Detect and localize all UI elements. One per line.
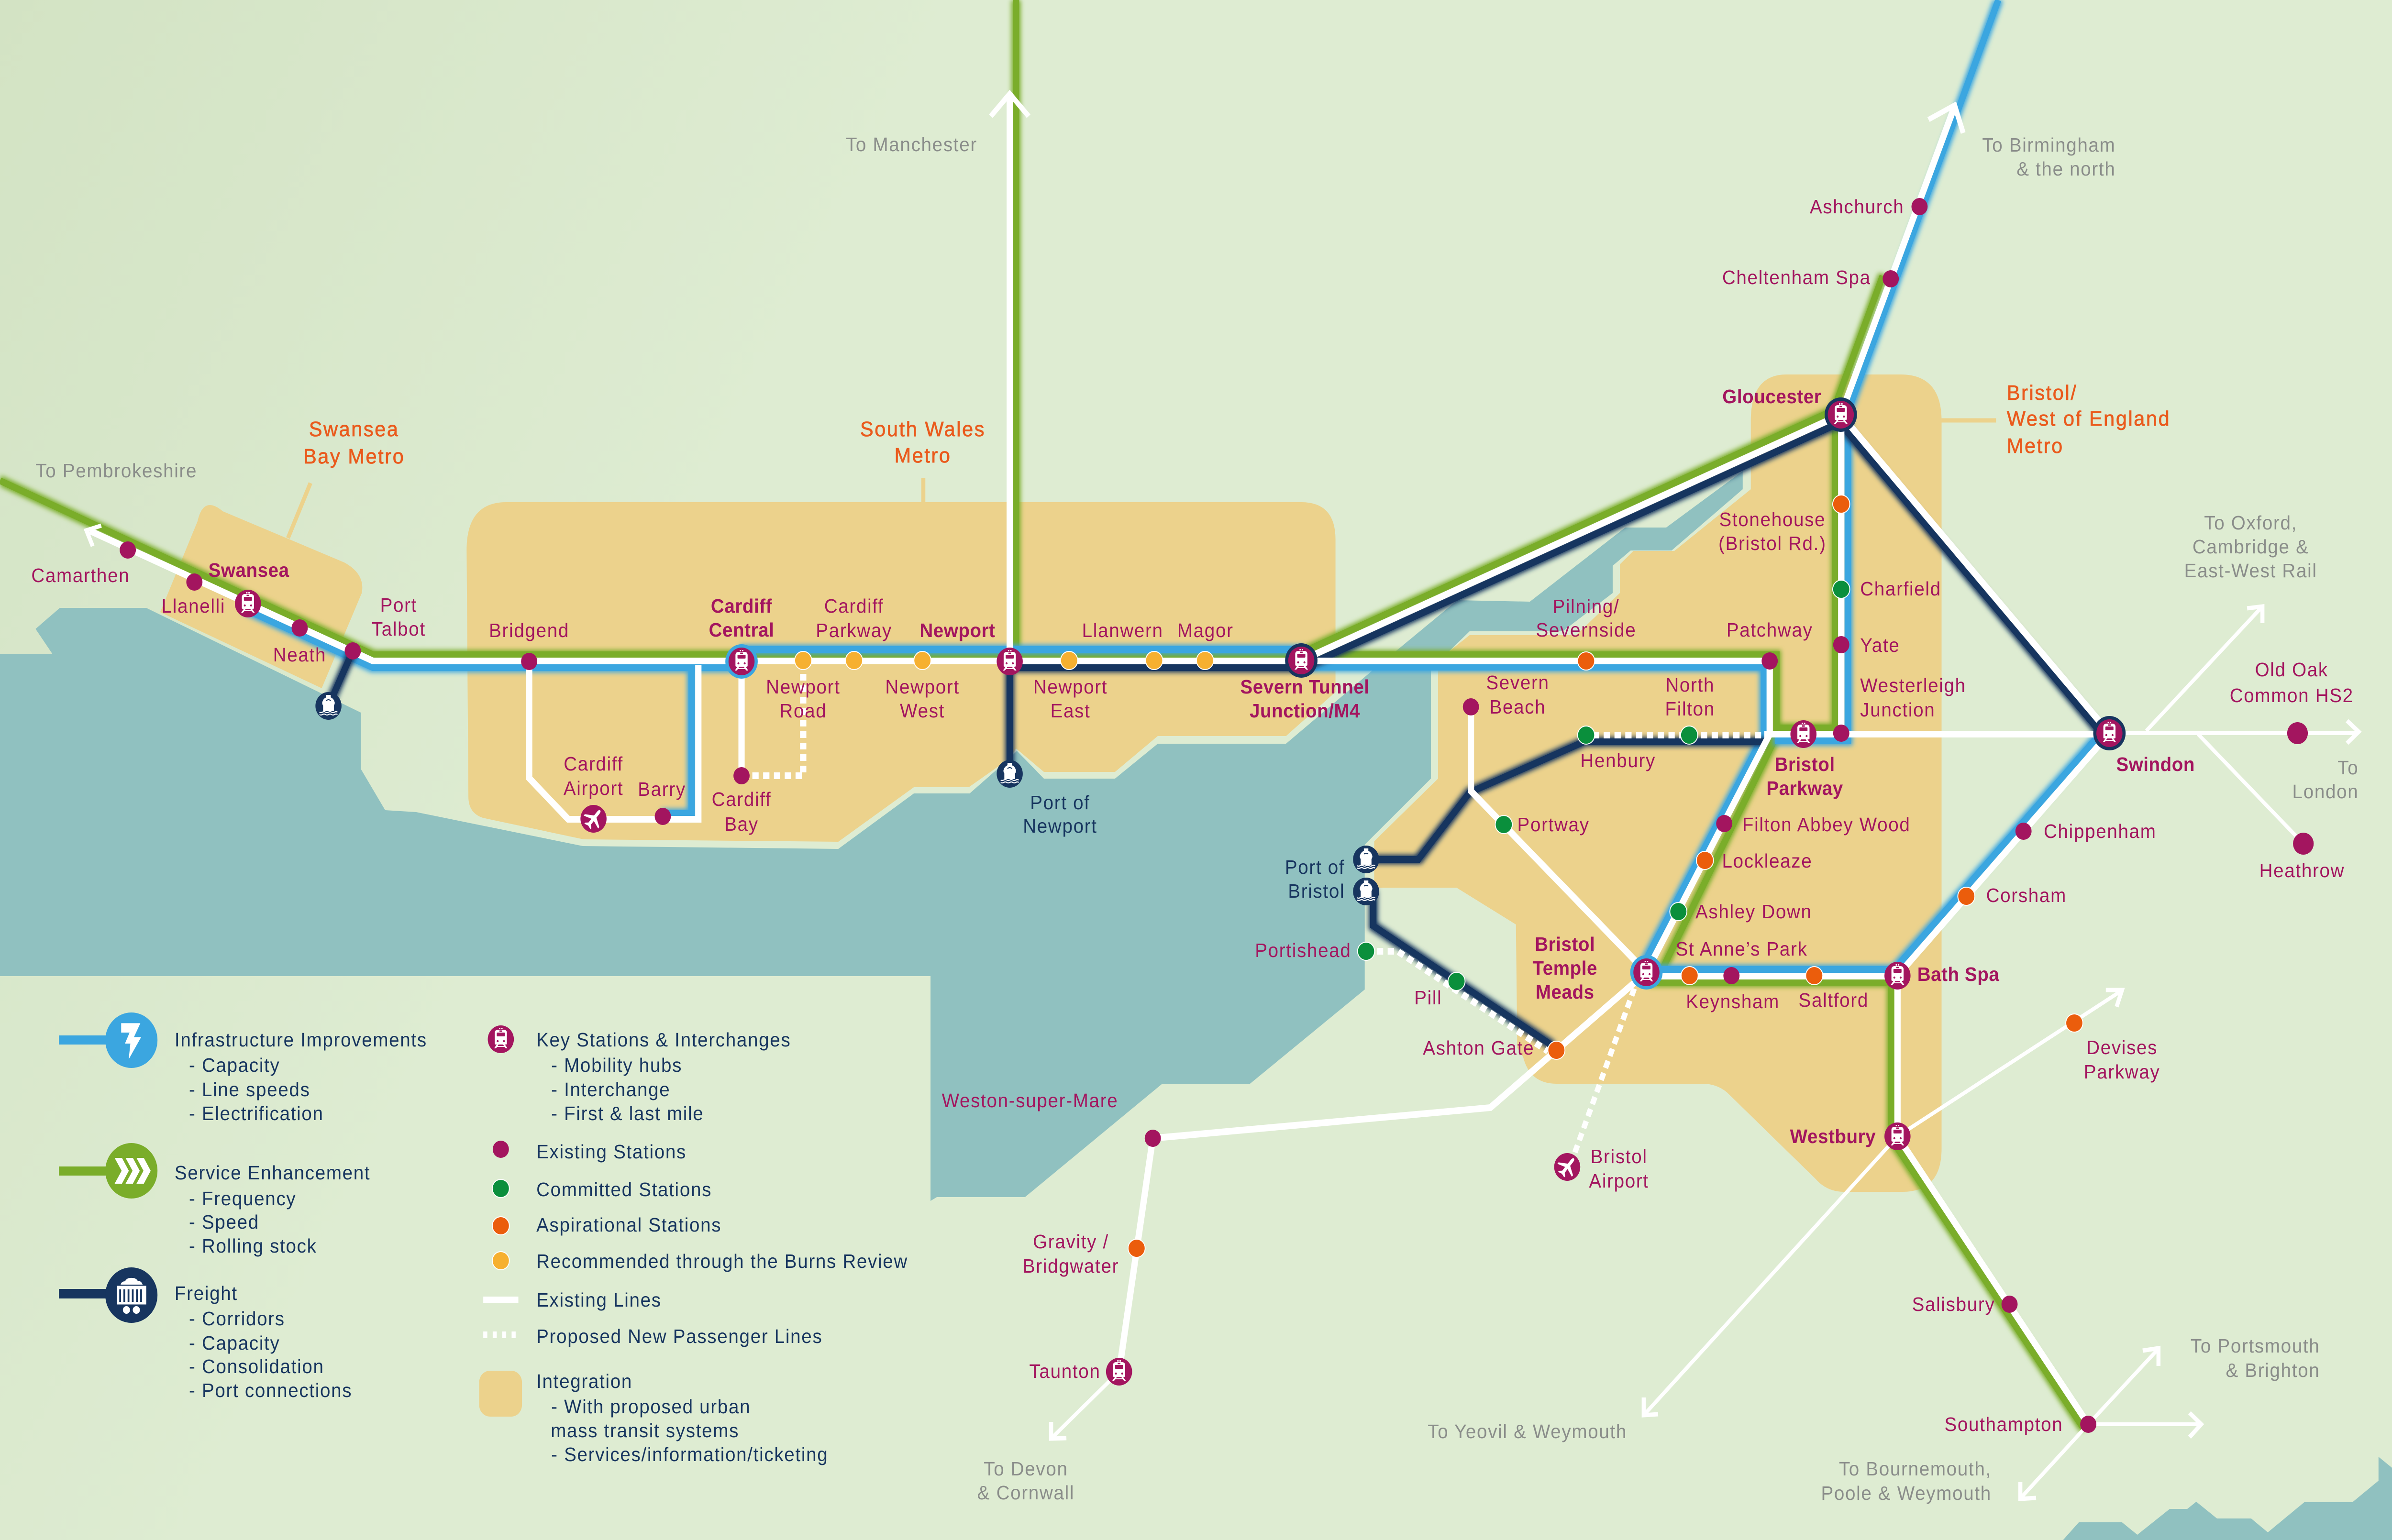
label: To London: To [2337, 757, 2359, 779]
key station: Severn Tunnel Junction [1285, 643, 1318, 678]
label: Ashley Down: Ashley Down [1695, 901, 1812, 923]
station: Cardiff Parkway [845, 651, 863, 670]
legend text: freight: - Consolidation [189, 1356, 324, 1377]
label: To Birmingham: & the north [2016, 158, 2115, 180]
label: Cardiff Airport: Cardiff [564, 753, 623, 775]
label: St Anne's Park: St Anne’s Park [1676, 938, 1808, 960]
label: Cardiff Central: Central [709, 619, 774, 641]
label: Old Oak Common HS2: Old Oak [2255, 659, 2328, 681]
legend icon: proposed lines [483, 1331, 519, 1338]
station: Llanwern [1146, 651, 1163, 670]
legend text: service enhancement: - Rolling stock [189, 1235, 317, 1257]
airport: Bristol [1554, 1152, 1581, 1181]
label: Port Talbot: Port [380, 594, 417, 616]
label: Bath Spa: Bath Spa [1917, 964, 2000, 985]
panel: South Wales Metro integration area [466, 502, 1336, 842]
label: To Devon: To Devon [984, 1458, 1068, 1480]
label: Weston-super-Mare: Weston-super-Mare [942, 1090, 1118, 1111]
label: Bristol Airport: Bristol [1591, 1146, 1648, 1167]
label: Filton Abbey Wood: Filton Abbey Wood [1742, 814, 1911, 836]
legend icon: freight [59, 1267, 157, 1323]
label: Cardiff Bay: Bay [724, 814, 759, 835]
label: Newport Road: Road [779, 700, 827, 722]
station: Southampton [2080, 1416, 2096, 1433]
heading: South Wales Metro: South Wales [860, 418, 986, 441]
label: To Portsmouth: To Portsmouth [2191, 1335, 2320, 1357]
key station: Westbury [1884, 1122, 1911, 1150]
label: Portway: Portway [1517, 814, 1590, 836]
label: Cardiff Parkway: Cardiff [824, 595, 884, 617]
airport: Cardiff [580, 804, 608, 833]
legend text: service enhancement: Service Enhancement [175, 1162, 370, 1184]
label: Keynsham: Keynsham [1686, 991, 1780, 1012]
heading: Bristol / West of England Metro: Metro [2007, 434, 2064, 458]
legend text: proposed lines: Proposed New Passenger Lines [536, 1326, 822, 1347]
label: Devises Parkway: Devises [2086, 1037, 2158, 1058]
station: Charfield [1833, 580, 1850, 598]
label: Henbury: Henbury [1580, 750, 1656, 771]
station: Carmarthen [120, 541, 136, 559]
station: Westerleigh Junction [1833, 725, 1849, 742]
label: Corsham: Corsham [1986, 885, 2067, 906]
label: Bristol Airport: Airport [1589, 1170, 1649, 1192]
legend text: key stations: - Mobility hubs [551, 1055, 682, 1076]
legend icon: infrastructure improvements [59, 1012, 157, 1068]
label: To Manchester: To Manchester [846, 134, 977, 155]
label: To Oxford: East-West Rail [2184, 560, 2317, 582]
station: Lockleaze [1696, 851, 1714, 869]
station: Cardiff Bay [733, 767, 750, 784]
heading: Bristol / West of England Metro: West of England [2007, 407, 2171, 430]
callout lines to metro headings [288, 420, 1996, 538]
infrastructure improvement lines (blue) [245, 0, 2105, 971]
station: Bridgend [521, 653, 537, 670]
station: Pill [1448, 972, 1465, 990]
key station: Bristol Temple Meads [1630, 955, 1662, 990]
legend text: infrastructure improvements: Infrastructure Improvements [175, 1029, 427, 1051]
legend text: infrastructure improvements: - Electrification [189, 1103, 324, 1124]
label: Bristol Temple Meads: Bristol [1535, 934, 1595, 955]
station: Port Talbot [344, 642, 361, 660]
legend text: infrastructure improvements: - Capacity [189, 1055, 280, 1076]
label: Saltford: Saltford [1799, 990, 1869, 1011]
station: Pilning [1578, 652, 1595, 670]
label: Llanelli: Llanelli [162, 595, 225, 617]
station: Llanelli [186, 573, 202, 591]
station: Barry [655, 808, 671, 825]
heading: Swansea Bay Metro: Bay Metro [303, 445, 405, 468]
legend text: recommended stations: Recommended through the Burns Review [536, 1251, 908, 1272]
legend text: freight: - Capacity [189, 1332, 280, 1354]
station: North Filton [1681, 726, 1698, 744]
legend text: integration: Integration [536, 1371, 632, 1392]
station: Ashchurch [1911, 198, 1927, 215]
station: Neath [291, 619, 308, 637]
sea: south coast [2063, 1457, 2392, 1540]
label: To Bournemouth: To Bournemouth, [1839, 1458, 1992, 1480]
station: Salisbury [2002, 1296, 2017, 1313]
port: Newport [997, 760, 1023, 788]
label: Ashton Gate: Ashton Gate [1423, 1037, 1534, 1059]
label: Charfield: Charfield [1860, 578, 1941, 600]
label: Patchway: Patchway [1727, 619, 1813, 641]
label: Camarthen: Camarthen [31, 565, 130, 586]
label: Severn Tunnel Junction/M4: Junction/M4 [1250, 700, 1360, 722]
station: Cheltenham Spa [1883, 270, 1899, 287]
legend text: key stations: - Interchange [551, 1079, 670, 1100]
legend text: infrastructure improvements: - Line speeds [189, 1079, 310, 1100]
label: Portishead: Portishead [1255, 940, 1351, 961]
legend text: integration: mass transit systems [551, 1420, 739, 1441]
label: Southampton: Southampton [1944, 1414, 2063, 1435]
station: Newport East [1061, 651, 1078, 670]
existing passenger lines (white) [90, 96, 2109, 1424]
legend text: freight: - Corridors [189, 1308, 285, 1330]
label: Bridgend: Bridgend [489, 620, 569, 641]
label: Cardiff Central: Cardiff [711, 595, 772, 617]
label: North Filton: Filton [1665, 698, 1715, 720]
legend icon: service enhancement [59, 1143, 157, 1199]
label: Gloucester: Gloucester [1722, 386, 1821, 407]
port: Bristol lower [1353, 878, 1379, 905]
heading: South Wales Metro: Metro [895, 444, 952, 467]
label: To Oxford: To Oxford, [2204, 512, 2297, 534]
label: Pilning/Severnside: Pilning/ [1552, 596, 1619, 617]
panel: Swansea Bay Metro integration area [160, 505, 362, 688]
label: To Oxford: Cambridge & [2193, 536, 2309, 558]
station: Gravity / Bridgwater [1128, 1239, 1145, 1257]
label: Swansea: Swansea [209, 560, 289, 581]
legend [59, 1012, 908, 1465]
label: Gravity / Bridgwater: Bridgwater [1023, 1255, 1119, 1277]
label: Bristol Temple Meads: Meads [1536, 981, 1595, 1003]
station: St Anne's Park [1681, 967, 1698, 985]
station: Devises Parkway [2066, 1014, 2083, 1032]
key station: Bristol Parkway [1790, 720, 1816, 748]
label: To Pembrokeshire: To Pembrokeshire [35, 460, 197, 482]
station: Newport West [914, 651, 931, 670]
station: Stonehouse [1833, 495, 1850, 513]
label: Port of Bristol: Port of [1285, 857, 1345, 878]
station: Saltford [1805, 967, 1823, 985]
label: Newport East: Newport [1033, 676, 1107, 698]
label: Taunton: Taunton [1030, 1361, 1101, 1382]
legend text: service enhancement: - Speed [189, 1211, 259, 1233]
thin onward connection lines (white) [1052, 607, 2358, 1497]
key station: Gloucester [1825, 397, 1857, 432]
label: Cardiff Parkway: Parkway [816, 620, 892, 641]
label: Bristol Parkway: Bristol [1775, 754, 1835, 775]
label: Newport West: West [900, 700, 945, 722]
label: Port of Bristol: Bristol [1288, 880, 1345, 902]
label: Westbury: Westbury [1790, 1126, 1876, 1147]
label: Severn Tunnel Junction/M4: Severn Tunnel [1240, 676, 1370, 698]
legend text: service enhancement: - Frequency [189, 1188, 296, 1210]
legend icon: committed stations [492, 1179, 509, 1198]
label: Port Talbot: Talbot [372, 618, 426, 640]
panel: Bristol / West of England Metro integration area [1374, 374, 1942, 1192]
legend icon: existing lines [483, 1297, 519, 1303]
label: Yate: Yate [1860, 635, 1900, 656]
label: Salisbury: Salisbury [1912, 1294, 1995, 1315]
legend text: integration: - With proposed urban [551, 1396, 751, 1418]
legend text: key stations: Key Stations & Interchanges [536, 1029, 791, 1051]
label: Barry: Barry [638, 779, 686, 800]
station: Heathrow [2293, 833, 2314, 855]
station: Portishead [1358, 942, 1374, 960]
label: Cheltenham Spa: Cheltenham Spa [1722, 267, 1871, 288]
label: Newport East: East [1051, 700, 1091, 722]
label: Chippenham: Chippenham [2044, 821, 2157, 842]
legend icon: existing stations [493, 1141, 509, 1158]
label: To Portsmouth: & Brighton [2226, 1360, 2320, 1381]
label: Pill: Pill [1414, 987, 1442, 1009]
station: Severn Beach [1463, 698, 1479, 715]
legend icon: key stations [488, 1025, 514, 1053]
port: Swansea [315, 692, 342, 720]
station: Patchway [1761, 652, 1778, 670]
station: Newport Road [795, 651, 812, 670]
label: Newport West: Newport [885, 676, 960, 698]
label: Old Oak Common HS2: Common HS2 [2230, 685, 2354, 706]
label: Port of Newport: Port of [1030, 792, 1090, 814]
station: Yate [1833, 636, 1849, 653]
station: Portway [1495, 815, 1512, 834]
label: To Devon: & Cornwall [977, 1482, 1074, 1504]
label: To Birmingham: To Birmingham [1982, 134, 2115, 156]
sea: Bristol Channel [0, 471, 1743, 1201]
label: Westerleigh Junction: Junction [1860, 699, 1935, 721]
station: Filton Abbey Wood [1716, 815, 1732, 832]
legend icon: integration [479, 1371, 522, 1417]
label: Pilning/Severnside: Severnside [1536, 619, 1636, 641]
port: Bristol upper [1353, 846, 1379, 873]
proposed new passenger lines (dotted) [742, 667, 1764, 1155]
label: Severn Beach: Beach [1490, 696, 1546, 718]
label: Stonehouse: Stonehouse [1719, 509, 1826, 530]
label: Ashchurch: Ashchurch [1810, 196, 1904, 218]
freight lines (navy) [329, 419, 2105, 1045]
key station: Swansea [235, 590, 261, 617]
label: Bristol Parkway: Parkway [1766, 778, 1843, 799]
station: Ashley Down [1670, 902, 1687, 921]
label: Cardiff Bay: Cardiff [712, 789, 771, 810]
label: To Bournemouth: Poole & Weymouth [1821, 1483, 1992, 1504]
key station: Bath Spa [1884, 962, 1911, 990]
station: Corsham [1958, 887, 1975, 905]
label: Heathrow: Heathrow [2259, 860, 2345, 881]
heading: Swansea Bay Metro: Swansea [309, 418, 399, 441]
label: Magor: Magor [1177, 620, 1234, 641]
station: Chippenham [2015, 823, 2032, 840]
label: Bristol Temple Meads: Temple [1532, 957, 1597, 979]
label: Westerleigh Junction: Westerleigh [1860, 675, 1966, 696]
legend text: freight: - Port connections [189, 1380, 352, 1401]
label: Newport: Newport [919, 620, 996, 641]
label: Gravity / Bridgwater: Gravity / [1033, 1231, 1109, 1253]
label: Stonehouse: (Bristol Rd.) [1718, 533, 1827, 554]
key station: Cardiff Central [725, 644, 758, 679]
label: Newport Road: Newport [766, 676, 841, 698]
legend icon: recommended stations [492, 1252, 509, 1270]
label: To Yeovil: To Yeovil & Weymouth [1428, 1421, 1627, 1442]
legend text: existing stations: Existing Stations [536, 1141, 687, 1163]
heading: Bristol / West of England Metro: Bristol/ [2007, 381, 2077, 405]
label: Lockleaze: Lockleaze [1722, 850, 1812, 872]
station: Magor [1196, 651, 1214, 670]
legend text: key stations: - First & last mile [551, 1103, 704, 1124]
legend text: aspirational stations: Aspirational Stations [536, 1214, 721, 1236]
legend icon: aspirational stations [492, 1217, 509, 1235]
station: Keynsham [1723, 967, 1739, 984]
label: To London: London [2292, 781, 2359, 803]
key station: Taunton [1106, 1358, 1132, 1386]
station: Ashton Gate [1548, 1041, 1565, 1059]
label: Severn Beach: Severn [1486, 672, 1550, 693]
station: Weston-super-Mare [1145, 1130, 1161, 1147]
station: Old Oak Common [2287, 722, 2308, 744]
label: Neath: Neath [273, 644, 326, 666]
key station: Newport [997, 648, 1023, 675]
legend text: committed stations: Committed Stations [536, 1179, 712, 1200]
label: Swindon: Swindon [2116, 754, 2195, 775]
label: Devises Parkway: Parkway [2084, 1061, 2160, 1083]
key station: Swindon [2093, 716, 2126, 750]
label: Port of Newport: Newport [1023, 815, 1097, 837]
label: Llanwern: Llanwern [1082, 620, 1163, 641]
legend text: integration: - Services/information/ticketing [551, 1444, 828, 1465]
legend text: freight: Freight [175, 1283, 238, 1304]
legend text: existing lines: Existing Lines [536, 1289, 662, 1311]
label: Cardiff Airport: Airport [564, 778, 623, 799]
label: North Filton: North [1665, 674, 1715, 696]
station: Henbury [1578, 726, 1595, 744]
